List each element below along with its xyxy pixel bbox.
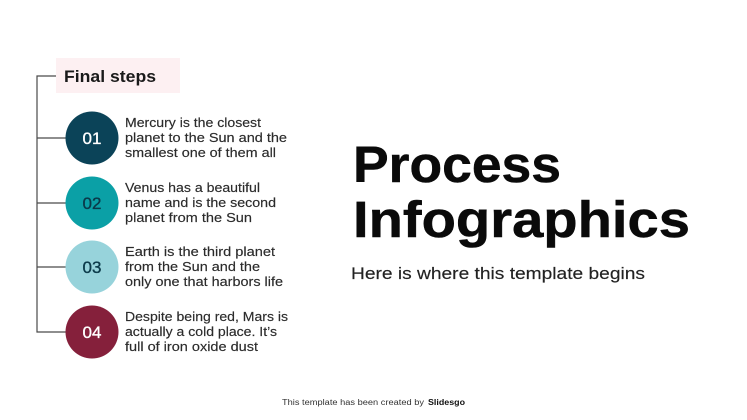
text: Mars: Despite being red, Mars is [125,310,288,324]
subtitle: Here is where this template begins [351,264,645,283]
icon: circle 02: 02 [83,194,101,213]
icon: circle 02 [66,176,118,230]
text: Venus: planet from the Sun [125,211,252,225]
text: Mars: full of iron oxide dust [125,340,259,354]
icon: circle 03: 03 [83,258,101,277]
text: Mars [125,310,288,354]
text: Venus: Venus has a beautiful [125,181,260,195]
step 02 [66,176,276,230]
text: Mercury: smallest one of them all [125,146,276,160]
icon: circle 01 [66,112,118,164]
text: Earth [125,245,283,289]
heading: Final steps: Final steps [64,67,156,86]
footer credit: This template has been created by [282,398,424,407]
title: Infographics [353,191,690,248]
icon: circle 01: 01 [83,129,101,148]
text: Earth: from the Sun and the [125,260,260,274]
icon: circle 04 [66,306,118,358]
text: Mercury: planet to the Sun and the [125,131,287,145]
text: Venus: name and is the second [125,196,276,210]
footer credit: Slidesgo [428,398,465,407]
text: Earth: Earth is the third planet [125,245,276,259]
step 03 [66,240,283,294]
icon: circle 04: 04 [83,323,101,342]
text: Mercury [125,116,287,160]
icon: circle 03 [66,240,118,294]
text: Mercury: Mercury is the closest [125,116,262,130]
title: Process [353,136,561,193]
heading: Final steps [56,58,180,93]
step 01 [66,112,287,164]
text: Earth: only one that harbors life [125,275,283,289]
connector bracket [37,76,66,332]
text: Mars: actually a cold place. It’s [125,325,277,339]
text: Venus [125,181,276,225]
title [353,136,690,248]
step 04 [66,306,288,358]
footer credit [282,398,465,407]
